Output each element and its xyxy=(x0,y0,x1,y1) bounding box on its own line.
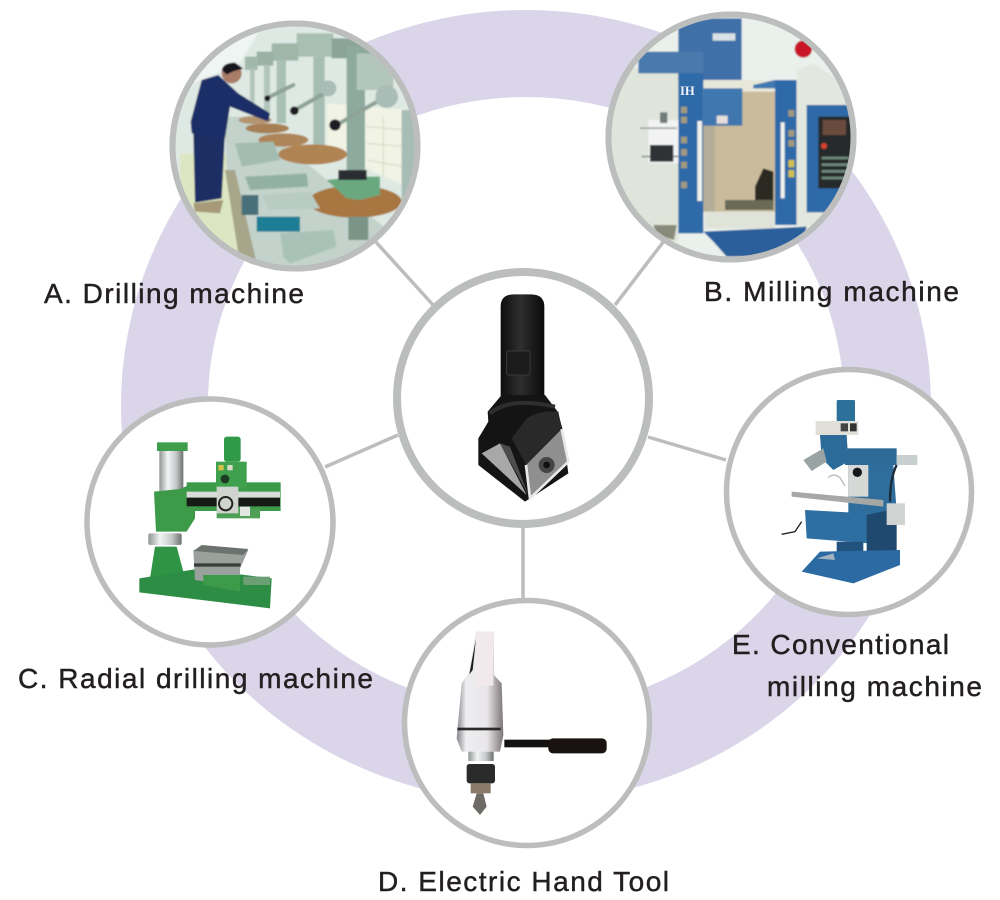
photo circle B: milling machine: IH xyxy=(680,84,695,98)
label E: E. Conventional xyxy=(732,629,949,660)
label E xyxy=(732,629,982,702)
label E: milling machine xyxy=(767,671,982,702)
label B: B. Milling machine xyxy=(704,276,959,307)
label A: A. Drilling machine xyxy=(44,278,304,309)
connector lines xyxy=(325,241,726,602)
circle E: conventional milling machine xyxy=(726,370,972,614)
photo circle B: milling machine xyxy=(607,12,860,265)
label C: C. Radial drilling machine xyxy=(18,663,373,694)
circle C: radial drilling machine xyxy=(87,399,333,645)
centre circle: countersink tool xyxy=(397,272,649,524)
label D: D. Electric Hand Tool xyxy=(378,866,669,897)
purple ring xyxy=(121,10,931,802)
circle D: electric hand tool xyxy=(404,600,650,846)
photo circle A: drilling machine xyxy=(170,20,420,270)
